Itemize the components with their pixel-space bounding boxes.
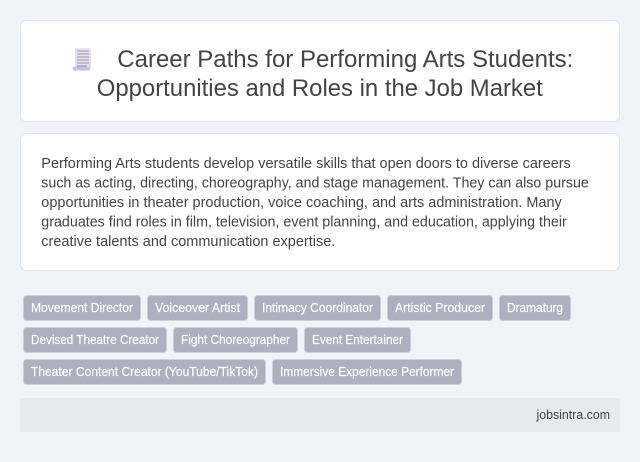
description text: graduates find roles in film, television, event planning, and education, applying their xyxy=(41,214,567,230)
description text: opportunities in theater production, voice coaching, and arts administration. Many xyxy=(41,195,563,211)
tag: Voiceover Artist xyxy=(148,296,248,320)
description text: creative talents and communication expertise. xyxy=(41,234,335,250)
footer xyxy=(20,398,620,432)
tag: Fight Choreographer: Fight Choreographer xyxy=(181,333,290,347)
tag: Dramaturg xyxy=(500,296,570,320)
tag: Artistic Producer xyxy=(388,296,492,320)
tag: Event Entertainer: Event Entertainer xyxy=(312,333,403,347)
tag: Movement Director: Movement Director xyxy=(31,301,133,315)
tag: Immersive Experience Performer: Immersive Experience Performer xyxy=(280,365,454,379)
panel: title card xyxy=(20,20,620,122)
tag: Immersive Experience Performer xyxy=(272,360,462,384)
tag: Fight Choreographer xyxy=(174,328,298,352)
title: Opportunities and Roles in the Job Market xyxy=(97,75,543,102)
tag: Artistic Producer: Artistic Producer xyxy=(395,301,485,315)
tag: Devised Theatre Creator xyxy=(24,328,166,352)
icon: scroll xyxy=(72,48,91,70)
tag: Voiceover Artist: Voiceover Artist xyxy=(155,301,241,315)
tag: Movement Director xyxy=(24,296,140,320)
tag: Event Entertainer xyxy=(304,328,410,352)
description text xyxy=(41,156,589,250)
title xyxy=(97,46,573,102)
tag: Theater Content Creator xyxy=(24,360,266,384)
tag: Intimacy Coordinator xyxy=(254,296,380,320)
tag: Intimacy Coordinator: Intimacy Coordinator xyxy=(262,301,373,315)
panel: description xyxy=(20,134,620,270)
description text: such as acting, directing, choreography, and stage management. They can also pursue xyxy=(41,176,589,192)
tags: career roles xyxy=(24,296,570,384)
tag: Devised Theatre Creator: Devised Theatre Creator xyxy=(31,333,159,347)
footer source text: jobsintra.com xyxy=(536,408,610,422)
description text: Performing Arts students develop versatile skills that open doors to diverse careers xyxy=(41,156,571,172)
tag: Theater Content Creator: Theater Content Creator (YouTube/TikTok) xyxy=(31,365,258,379)
tag: Dramaturg: Dramaturg xyxy=(507,301,563,315)
title: Career Paths for Performing Arts Students: xyxy=(117,46,573,73)
